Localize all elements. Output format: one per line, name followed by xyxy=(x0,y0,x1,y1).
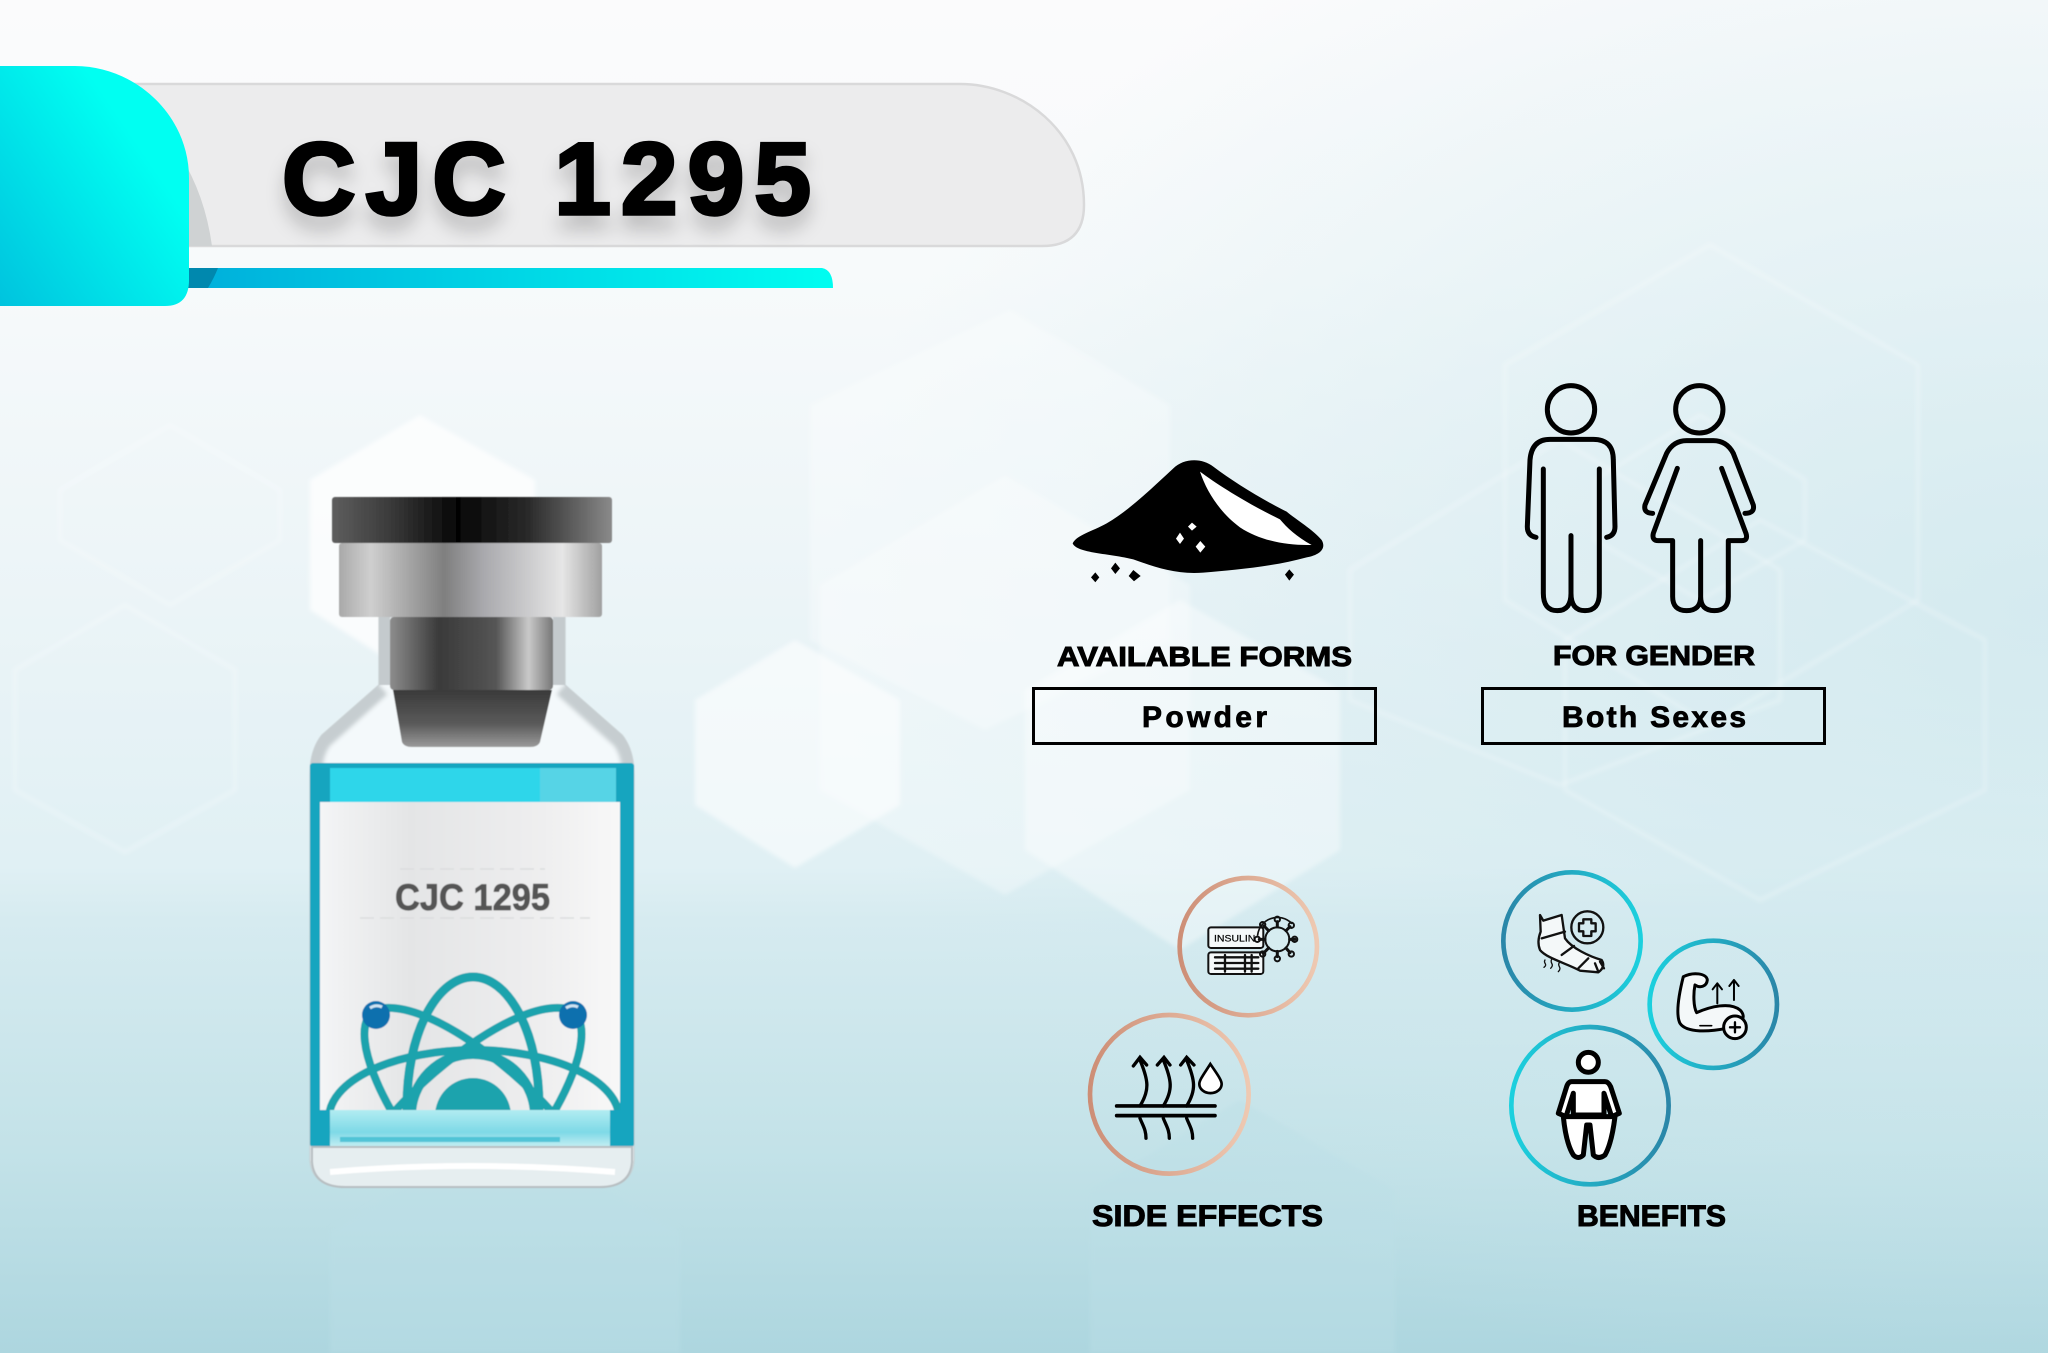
icon: weight loss xyxy=(1511,1027,1669,1184)
vial neck xyxy=(390,617,553,690)
grey title bar xyxy=(120,84,1084,246)
liquid highlight xyxy=(330,768,540,802)
value box: powder xyxy=(1034,688,1376,744)
vial label xyxy=(320,802,620,1110)
title underline bar xyxy=(185,268,833,288)
label: for gender: FOR GENDER xyxy=(1553,640,1755,671)
icon: powder pile xyxy=(1073,460,1323,582)
panel: for gender xyxy=(1482,386,1824,744)
icon: insulin and virus xyxy=(1180,878,1317,1015)
atom logo xyxy=(325,972,621,1111)
banner fold shadow xyxy=(180,155,212,246)
rubber stopper xyxy=(393,690,552,747)
panel: benefits xyxy=(1503,872,1777,1233)
icon: muscle arm xyxy=(1650,941,1777,1068)
label: side effects: SIDE EFFECTS xyxy=(1092,1200,1323,1233)
title text: CJC 1295 xyxy=(282,122,811,236)
glass shoulder edges xyxy=(311,685,633,764)
panel: side effects xyxy=(1090,878,1323,1233)
value box: both sexes xyxy=(1482,688,1824,744)
value box: both sexes: Both Sexes xyxy=(1562,701,1746,734)
icon: foot care xyxy=(1503,872,1641,1010)
label text: CJC 1295 xyxy=(395,877,550,918)
underline fold xyxy=(185,268,218,288)
silver crimp xyxy=(339,543,602,617)
value box: powder: Powder xyxy=(1142,701,1267,734)
lower liquid band xyxy=(330,1110,610,1147)
faint label lines xyxy=(360,869,590,918)
icon: male and female figures xyxy=(1527,386,1754,611)
base reflection xyxy=(330,1166,615,1172)
label: available forms: AVAILABLE FORMS xyxy=(1057,641,1352,672)
lower liquid shade xyxy=(340,1137,560,1142)
icon: insulin and virus: INSULIN xyxy=(1214,934,1255,944)
liquid highlight right xyxy=(540,768,616,802)
panel: available forms xyxy=(1034,460,1376,744)
icon: sweating skin xyxy=(1090,1015,1249,1174)
black cap xyxy=(332,497,612,543)
title banner xyxy=(0,66,1084,306)
vial illustration xyxy=(310,497,634,1233)
neck side glass xyxy=(379,617,565,685)
label: benefits: BENEFITS xyxy=(1577,1200,1726,1233)
glass base xyxy=(312,1147,632,1187)
cyan corner block xyxy=(0,66,189,306)
liquid xyxy=(310,763,634,1147)
glass body xyxy=(310,617,634,1187)
